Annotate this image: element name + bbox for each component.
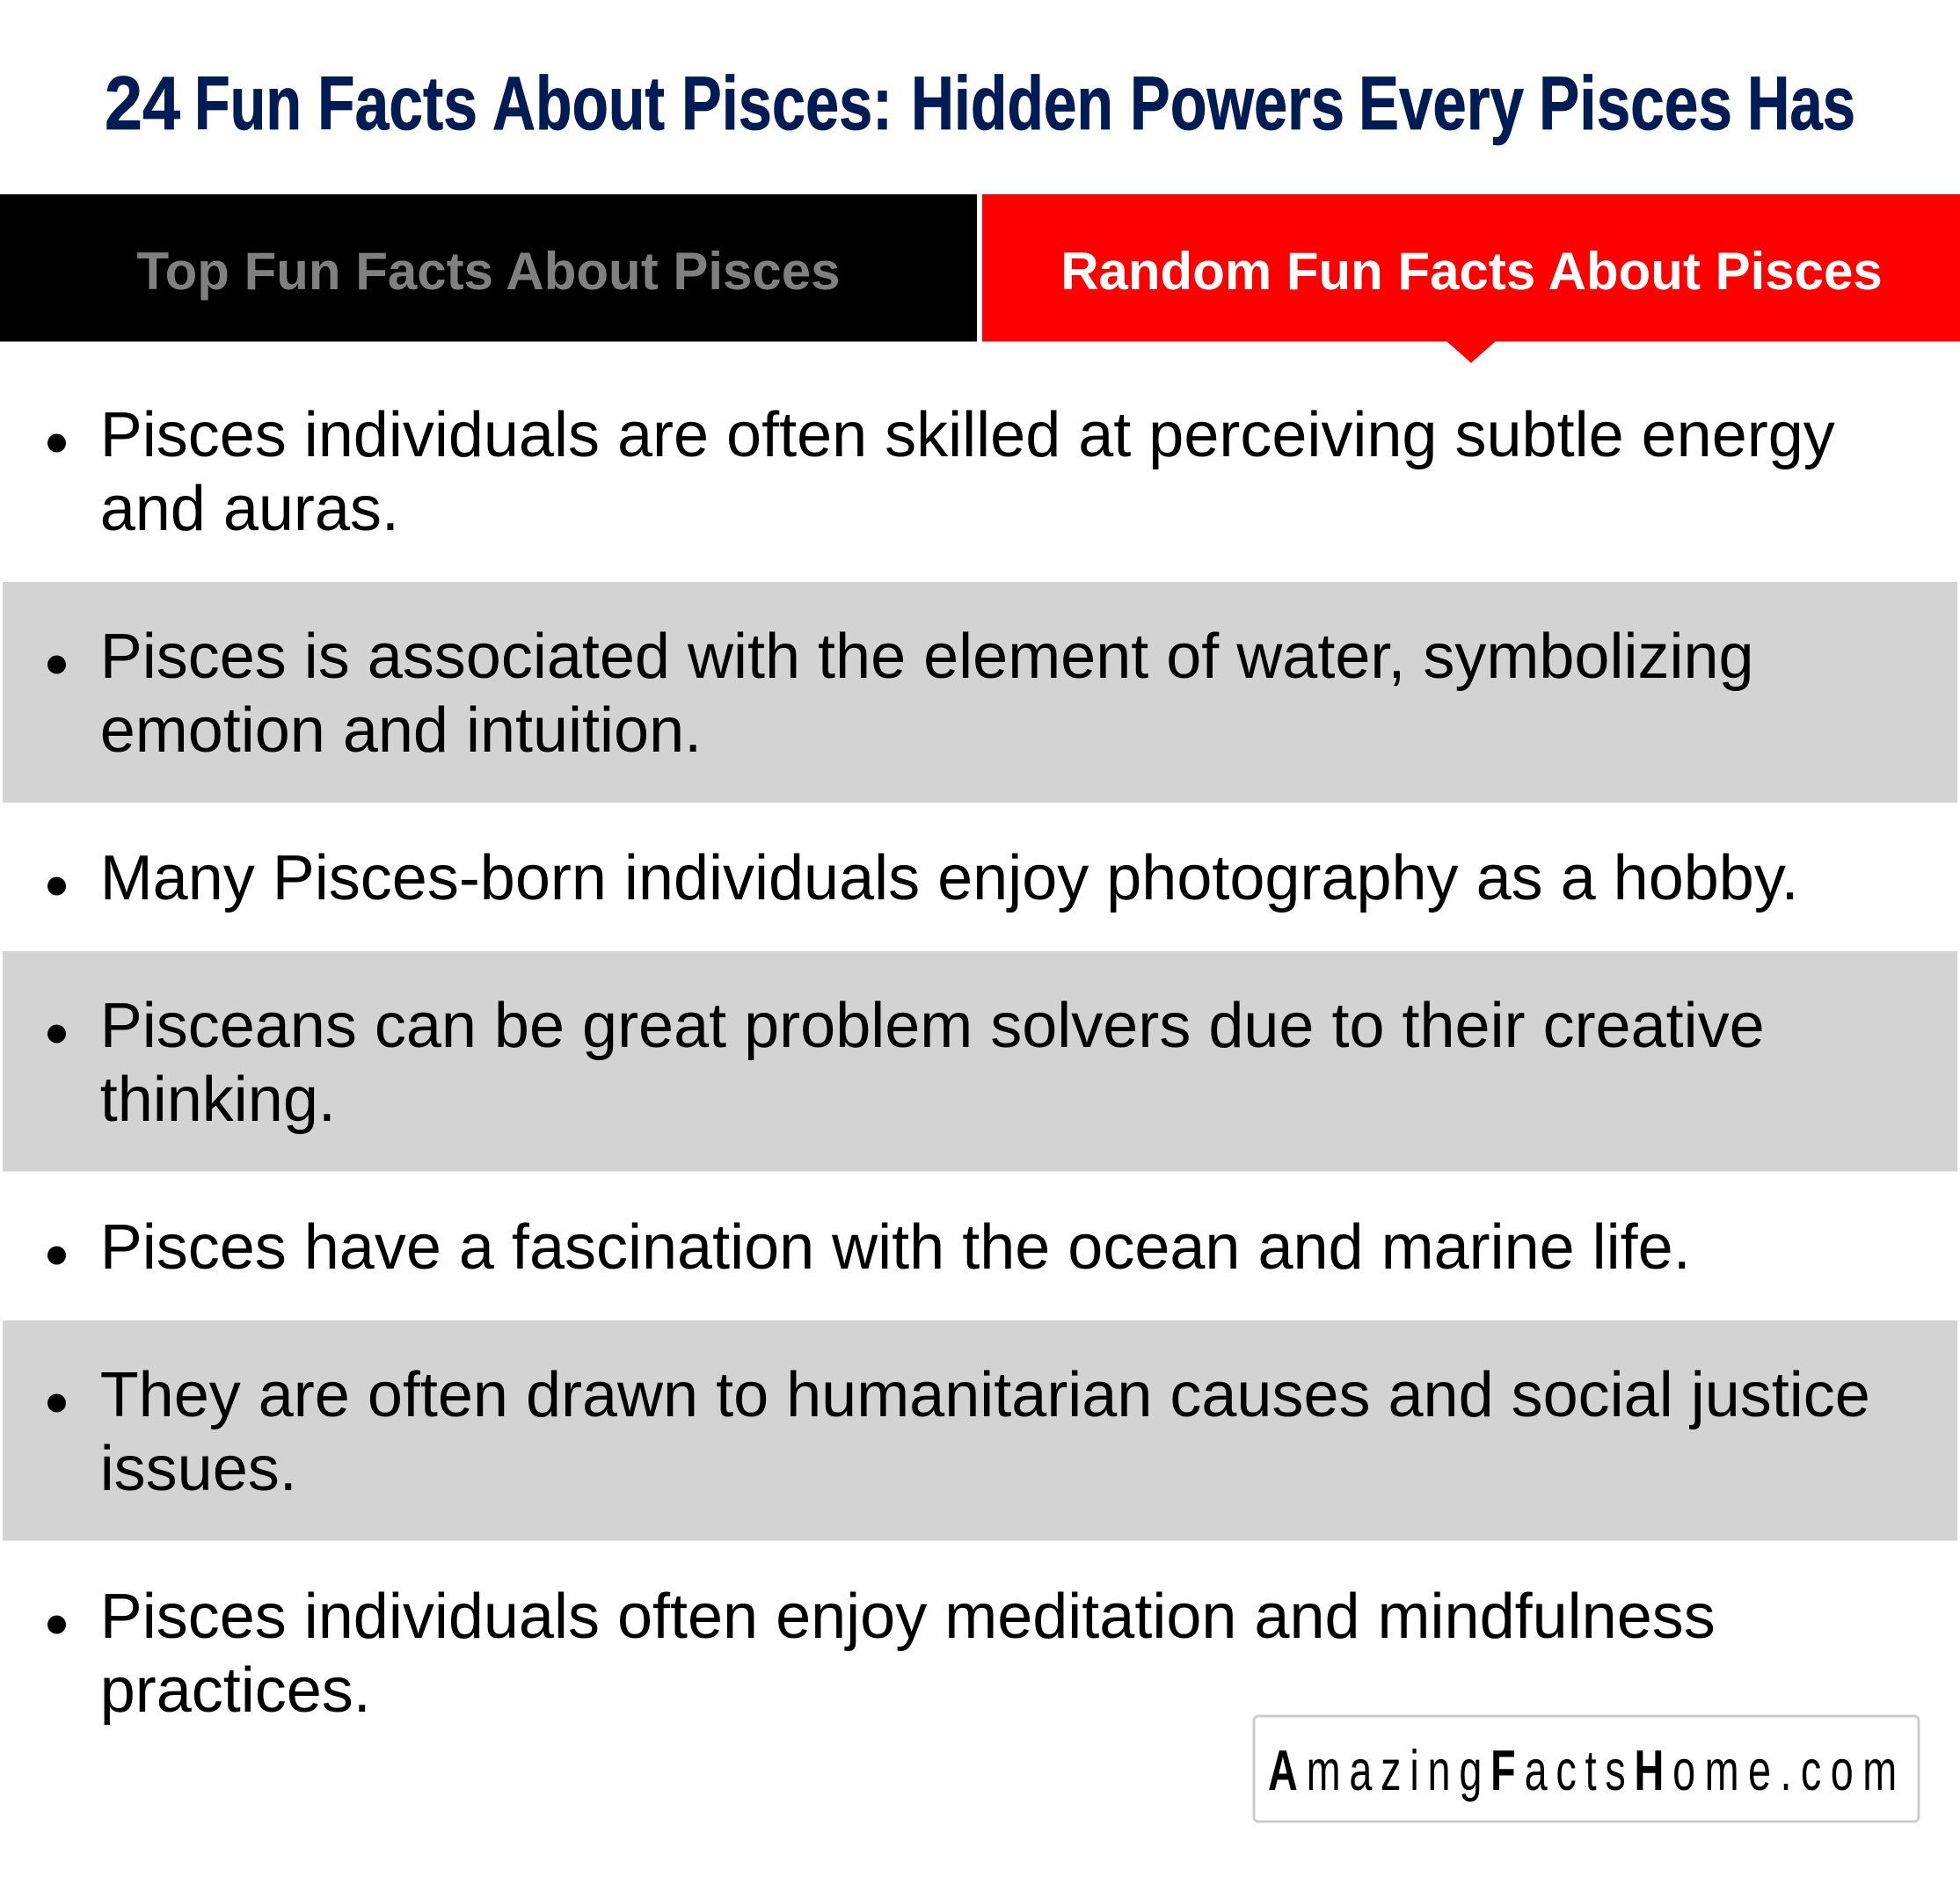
- title: 24: [105, 62, 180, 146]
- fact 5: Pisces have a fascination with the ocean and marine life.: [100, 1212, 1691, 1283]
- fact 7: Pisces individuals often enjoy meditation and mindfulness: [100, 1582, 1716, 1652]
- fact 4: Pisceans can be great problem solvers due to their creative: [100, 991, 1765, 1061]
- title: Powers: [1130, 62, 1344, 146]
- title: Facts: [317, 62, 477, 146]
- fact 2: emotion and intuition.: [100, 695, 702, 766]
- title: About: [492, 62, 665, 146]
- fact 1: Pisces individuals are often skilled at perceiving subtle energy: [100, 400, 1835, 470]
- fact 3: Many Pisces-born individuals enjoy photography as a hobby.: [100, 843, 1799, 913]
- fact 4: thinking.: [100, 1065, 336, 1135]
- title: Has: [1747, 62, 1855, 146]
- tab: random fun facts (active): Random Fun Facts About Pisces: [1060, 242, 1883, 301]
- fact 2: Pisces is associated with the element of water, symbolizing: [100, 622, 1754, 692]
- fact 4: [3, 951, 1957, 1171]
- tab: top fun facts: Top Fun Facts About Pisces: [136, 242, 841, 301]
- fact 6: [3, 1320, 1957, 1540]
- fact 7: [47, 1582, 1716, 1726]
- title: Hidden: [911, 62, 1113, 146]
- watermark badge: AmazingFactsHome.com: [1268, 1740, 1906, 1803]
- tab: random fun facts (active): [982, 194, 1960, 363]
- fact 6: They are often drawn to humanitarian causes and social justice: [100, 1360, 1870, 1430]
- tab: top fun facts: [0, 194, 977, 341]
- title: Pisces: [1539, 62, 1732, 146]
- watermark badge: [1254, 1716, 1919, 1822]
- title: Pisces:: [681, 62, 893, 146]
- title: Every: [1359, 62, 1524, 146]
- fact 7: practices.: [100, 1655, 371, 1726]
- title: Fun: [194, 62, 302, 146]
- fact 1: and auras.: [100, 474, 399, 544]
- title: [105, 62, 1855, 146]
- fact 6: issues.: [100, 1434, 297, 1504]
- fact 2: [3, 582, 1957, 803]
- fact 1: [47, 400, 1835, 544]
